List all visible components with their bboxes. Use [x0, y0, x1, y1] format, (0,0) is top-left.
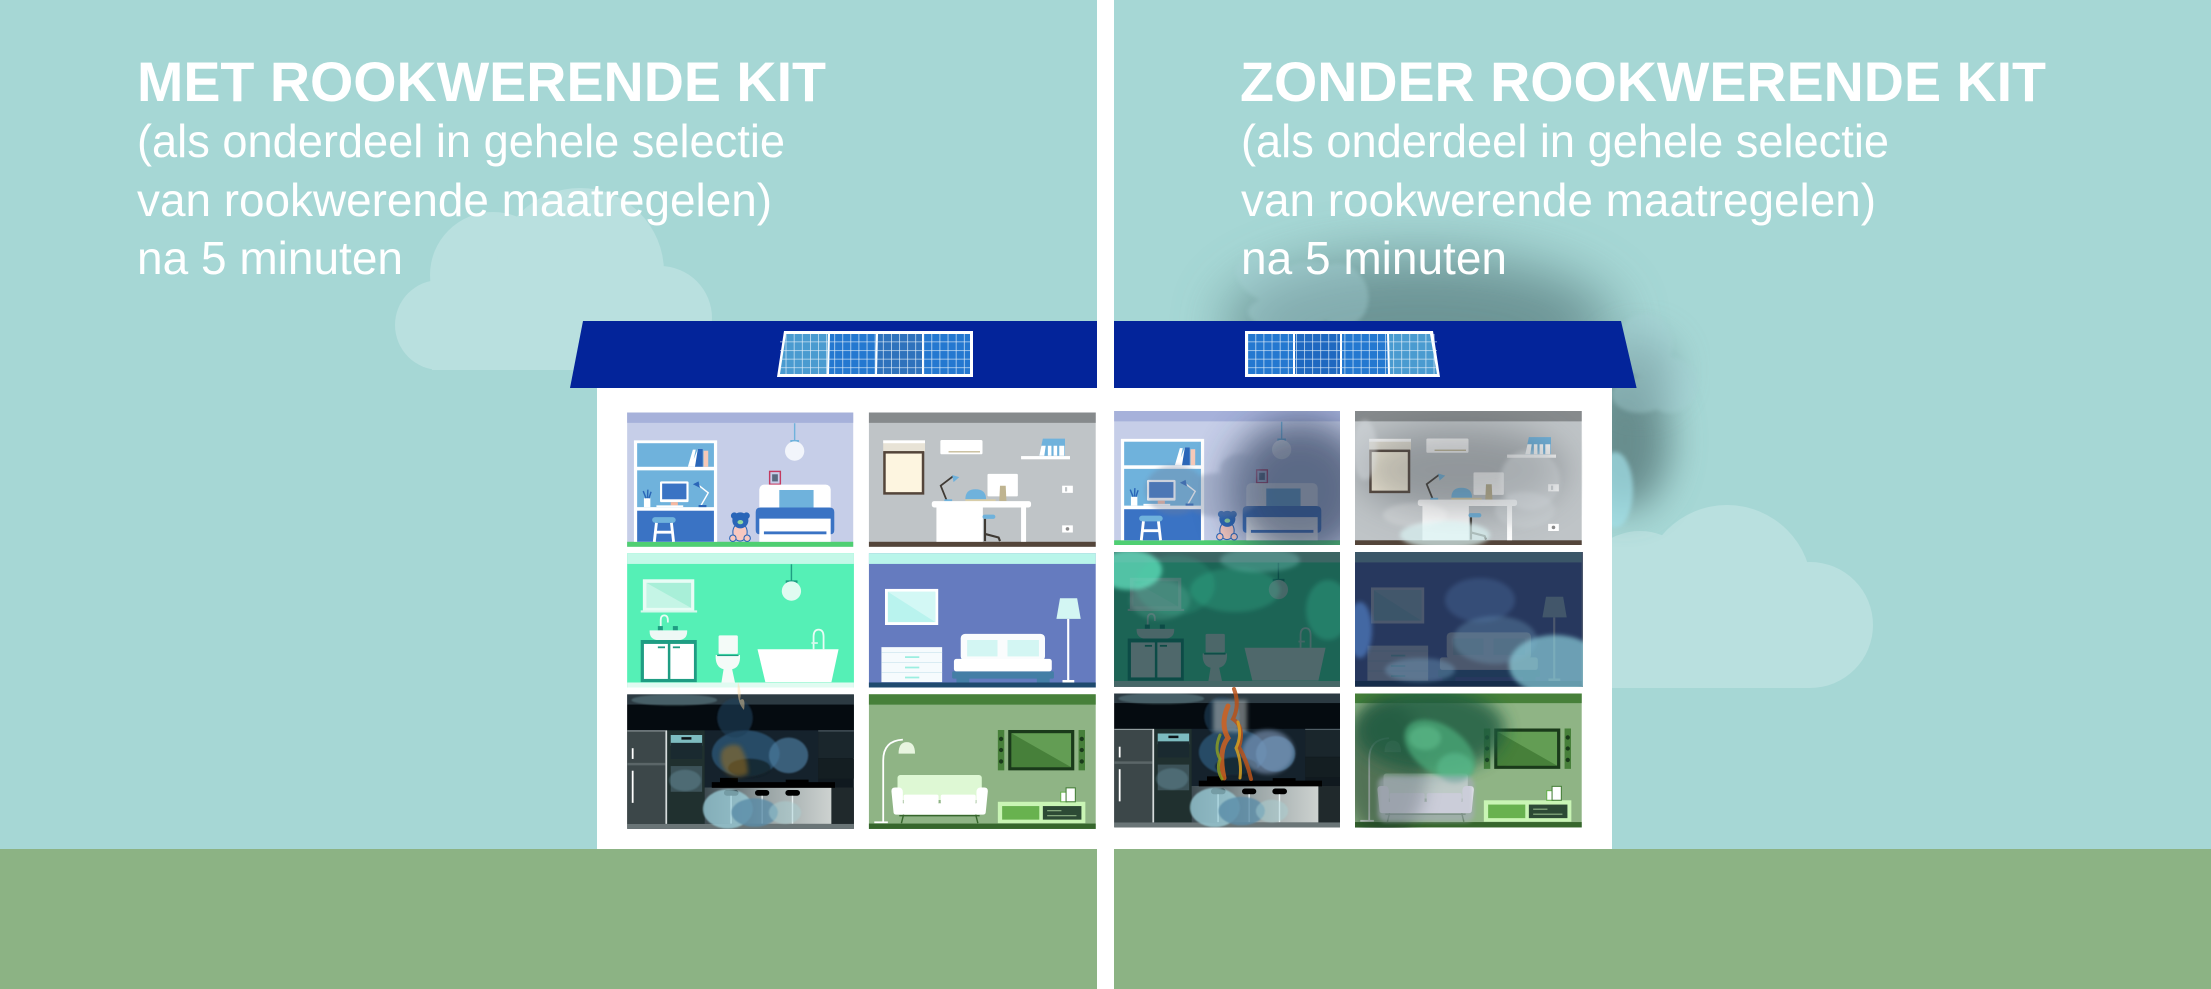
room: kantoor: [869, 412, 1096, 547]
flames: [1217, 689, 1251, 779]
title left: MET ROOKWERENDE KIT: [137, 50, 826, 113]
room: slaapkamer: [869, 553, 1096, 687]
subtitle left: (als onderdeel in gehele selectie: [137, 115, 785, 167]
subtitle left: van rookwerende maatregelen): [137, 174, 772, 226]
subtitle right: van rookwerende maatregelen): [1241, 174, 1876, 226]
solar panel right: [1245, 331, 1440, 377]
room with smoke: kantoor: [1353, 411, 1582, 549]
room with smoke: woonkamer: [1355, 694, 1582, 828]
subtitle right: [1241, 115, 1889, 284]
central divider: [1097, 0, 1114, 989]
house right: [1098, 321, 1637, 849]
room: badkamer: [627, 553, 854, 687]
roof left: [570, 321, 1097, 388]
solar panel left: [777, 331, 973, 377]
room: kinderkamer: [627, 412, 853, 547]
room: keuken met rook: [627, 682, 854, 829]
roof right: [1114, 321, 1637, 388]
cloud left: [395, 188, 712, 370]
house wall left: [597, 388, 1097, 849]
room: woonkamer: [869, 694, 1096, 829]
subtitle right: na 5 minuten: [1241, 232, 1507, 284]
smoke halo right: [1225, 247, 1698, 528]
subtitle left: [137, 115, 785, 284]
subtitle right: (als onderdeel in gehele selectie: [1241, 115, 1889, 167]
room with smoke: badkamer: [1114, 552, 1340, 687]
subtitle left: na 5 minuten: [137, 232, 403, 284]
room with smoke: slaapkamer: [1355, 552, 1583, 687]
room with smoke and fire: keuken: [1114, 689, 1341, 827]
ground: [0, 849, 2211, 989]
house wall right: [1114, 388, 1612, 849]
cloud right: [1578, 505, 1873, 688]
house left: [570, 321, 1097, 849]
room with smoke: kinderkamer: [1114, 411, 1340, 545]
title right: ZONDER ROOKWERENDE KIT: [1240, 50, 2046, 113]
